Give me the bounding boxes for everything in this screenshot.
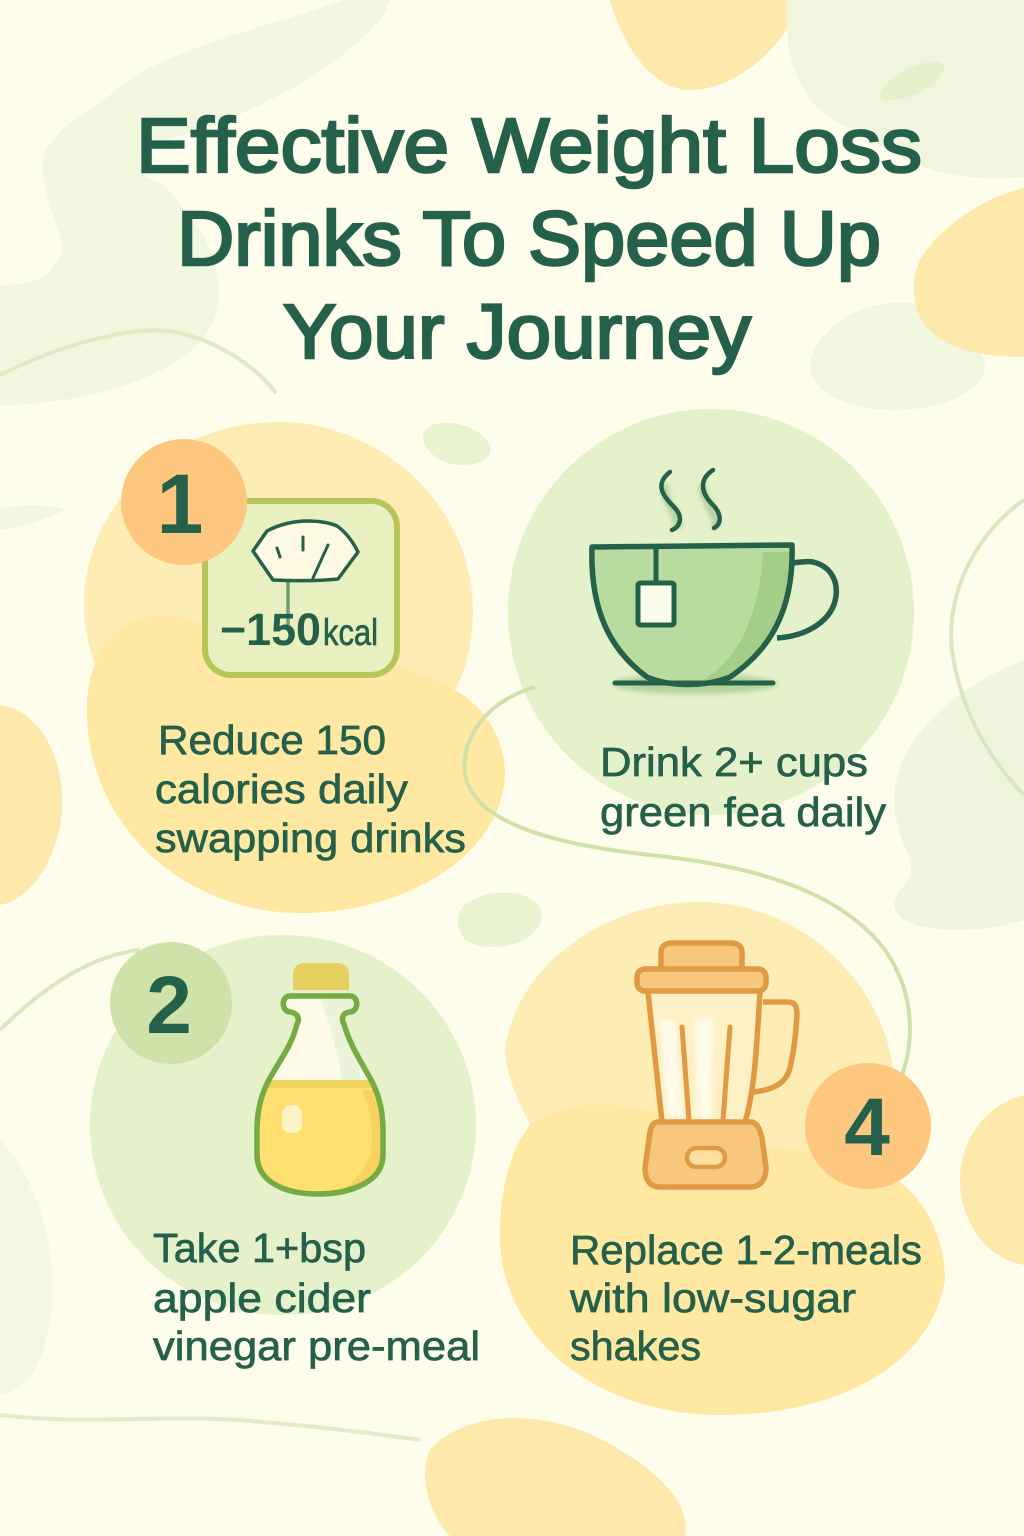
panel background: [84, 422, 505, 913]
panel: shakes: [500, 902, 945, 1415]
number badge 2: 2: [146, 960, 192, 1051]
panel: reduce calories: [84, 422, 505, 913]
panel: green tea: [508, 409, 914, 835]
title: [136, 103, 922, 375]
text: reduce calories: swapping drinks: [155, 815, 466, 861]
icon: tea cup: [592, 470, 836, 694]
panel: vinegar: [90, 935, 480, 1369]
text: reduce calories: [155, 717, 466, 861]
icon: scale: kcal: [323, 612, 378, 653]
icon: bottle: [250, 963, 390, 1200]
text: vinegar: [153, 1225, 480, 1369]
text: green tea: Drink 2+ cups: [600, 739, 868, 785]
text: green tea: green fea daily: [600, 789, 887, 835]
number badge 2: [110, 942, 232, 1064]
text: reduce calories: calories daily: [155, 766, 409, 812]
title: Drinks To Speed Up: [177, 196, 881, 282]
title: Your Journey: [283, 289, 752, 375]
connector curve: [464, 687, 910, 1100]
number badge 1: 1: [157, 457, 203, 551]
number badge 4: 4: [844, 1082, 890, 1173]
text: vinegar: apple cider: [153, 1275, 371, 1321]
number badge 1: [121, 439, 247, 565]
text: vinegar: vinegar pre-meal: [153, 1323, 480, 1369]
text: shakes: shakes: [570, 1323, 701, 1369]
panel background: [508, 409, 914, 815]
text: shakes: with low-sugar: [569, 1275, 856, 1321]
icon: blender: [637, 943, 797, 1187]
text: reduce calories: Reduce 150: [158, 717, 386, 763]
text: shakes: Replace 1-2-meals: [570, 1227, 922, 1273]
number badge 4: [805, 1063, 931, 1189]
icon: scale: [205, 501, 397, 675]
icon: scale: −150: [220, 604, 321, 655]
panel background: [90, 935, 476, 1315]
text: green tea: [600, 739, 887, 835]
text: shakes: [569, 1227, 922, 1369]
title: Effective Weight Loss: [136, 103, 922, 189]
panel background: [500, 902, 945, 1415]
text: vinegar: Take 1+bsp: [153, 1225, 366, 1271]
